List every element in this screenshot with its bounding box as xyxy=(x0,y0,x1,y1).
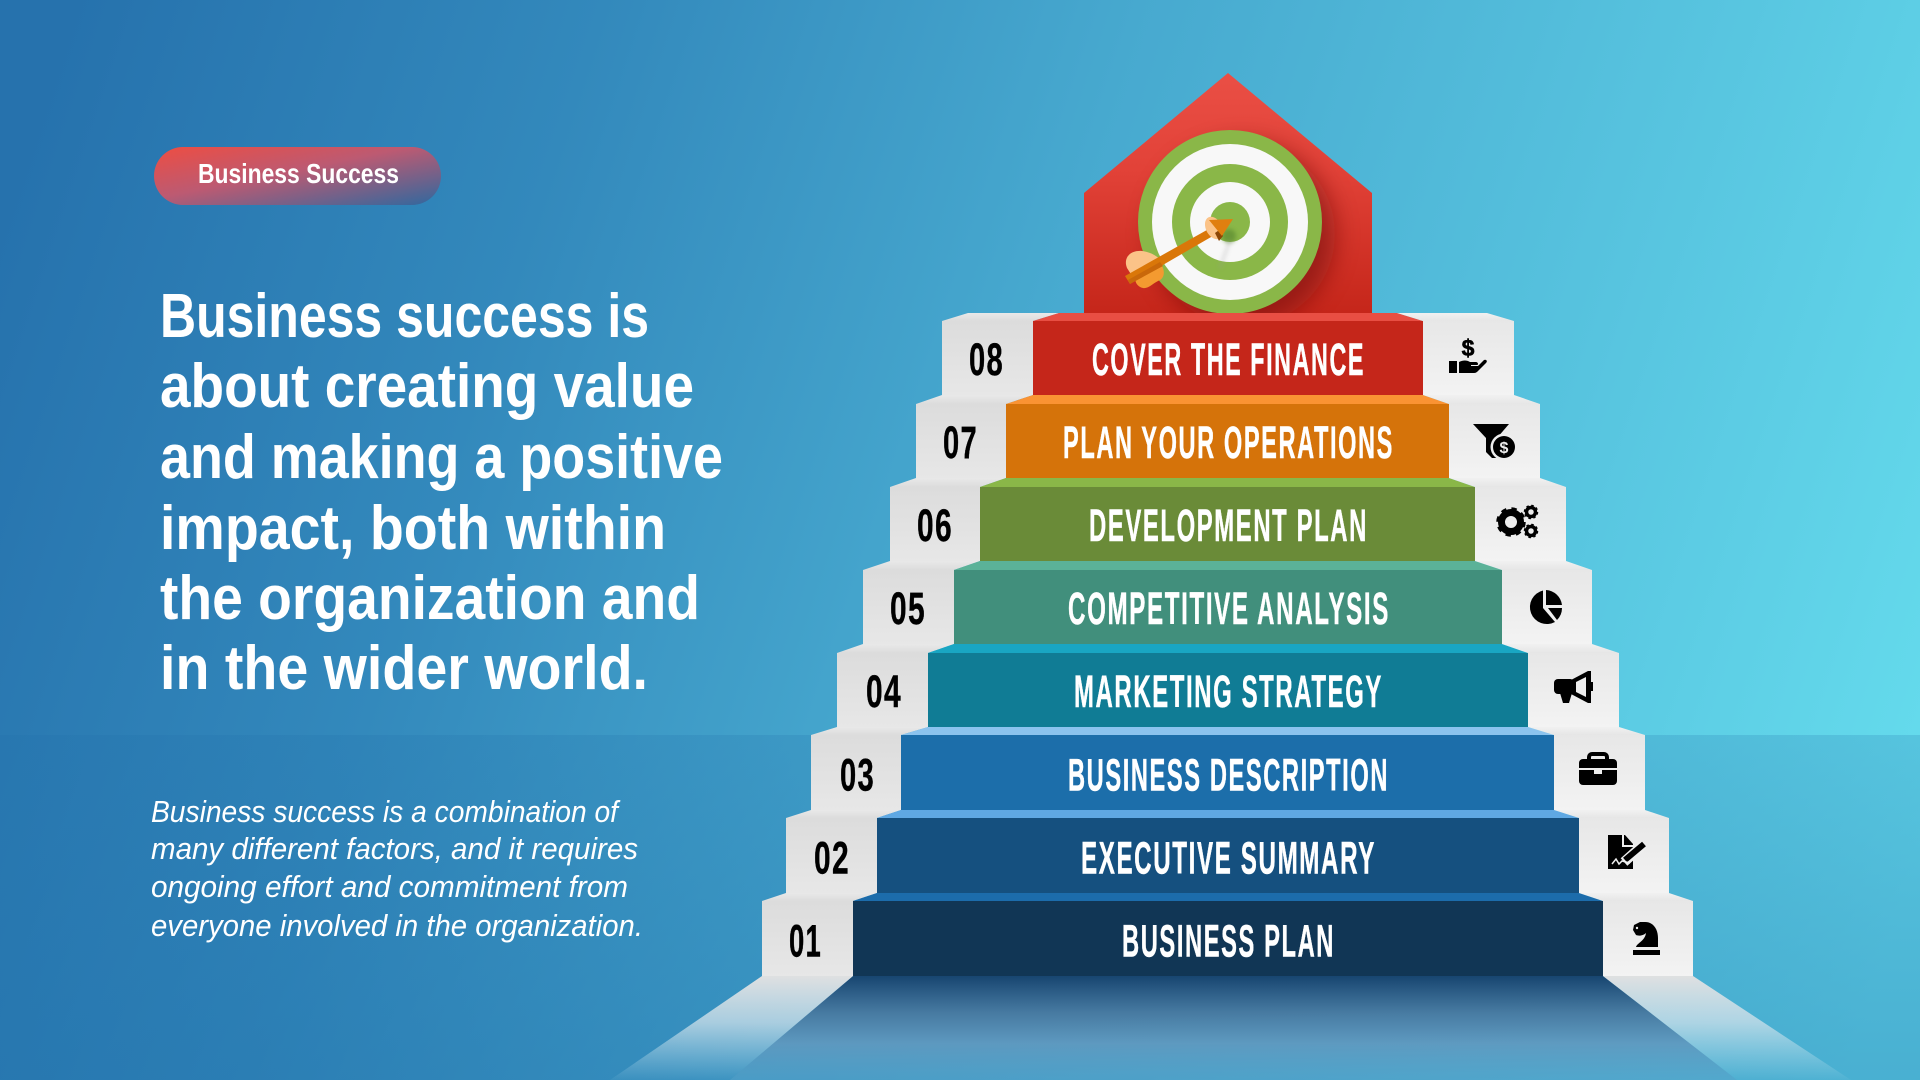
badge: Business Success xyxy=(154,147,441,205)
heading xyxy=(160,282,723,703)
body text: many different factors, and it requires xyxy=(151,831,638,866)
icon: chess knight xyxy=(1633,922,1660,955)
icon: funnel with dollar xyxy=(1473,424,1518,460)
step 01: business plan: BUSINESS PLAN xyxy=(1122,916,1335,966)
step 02: executive summary: 02 xyxy=(814,832,850,884)
step 04: marketing strategy: MARKETING STRATEGY xyxy=(1074,666,1383,717)
step 08: cover the finance xyxy=(942,313,1514,395)
step 04: marketing strategy xyxy=(837,644,1619,727)
icon: hand with dollar: $ xyxy=(1462,335,1475,361)
body text: Business success is a combination of xyxy=(151,794,621,829)
step 06: development plan: 06 xyxy=(917,500,953,551)
icon: signed document xyxy=(1608,835,1644,869)
heading: about creating value xyxy=(160,352,694,421)
step 07: plan your operations: 07 xyxy=(943,417,978,468)
step 03: business description xyxy=(811,727,1645,810)
house and target xyxy=(1084,73,1372,326)
step 02: executive summary: EXECUTIVE SUMMARY xyxy=(1081,832,1376,884)
step 07: plan your operations: PLAN YOUR OPERATIONS xyxy=(1063,417,1394,468)
step 06: development plan: DEVELOPMENT PLAN xyxy=(1089,500,1368,551)
heading: impact, both within xyxy=(160,494,666,563)
heading: Business success is xyxy=(160,282,649,351)
heading: the organization and xyxy=(160,564,700,633)
heading: and making a positive xyxy=(160,423,723,492)
step 05: competitive analysis: COMPETITIVE ANALYSIS xyxy=(1068,583,1390,634)
step 08: cover the finance: 08 xyxy=(969,334,1004,385)
step 01: business plan: 01 xyxy=(789,916,822,966)
step 07: plan your operations xyxy=(916,395,1540,478)
floor path xyxy=(610,976,1851,1080)
step 02: executive summary xyxy=(786,810,1669,893)
body text: everyone involved in the organization. xyxy=(151,908,643,943)
step 03: business description: BUSINESS DESCRIPTION xyxy=(1068,750,1389,800)
icon: megaphone xyxy=(1554,671,1593,703)
body text: ongoing effort and commitment from xyxy=(151,869,628,904)
step 05: competitive analysis xyxy=(863,561,1592,644)
step 04: marketing strategy: 04 xyxy=(866,666,902,717)
badge: Business Success: Business Success xyxy=(198,158,399,189)
step 06: development plan xyxy=(890,478,1566,561)
body text xyxy=(151,794,643,943)
icon: gears xyxy=(1498,506,1537,537)
icon: pie chart xyxy=(1530,590,1562,624)
arrow xyxy=(1125,214,1233,288)
icon: funnel with dollar: $ xyxy=(1500,440,1509,457)
step 08: cover the finance: COVER THE FINANCE xyxy=(1092,334,1365,385)
step 03: business description: 03 xyxy=(840,750,875,800)
icon: briefcase xyxy=(1579,754,1617,785)
step 05: competitive analysis: 05 xyxy=(890,583,926,634)
heading: in the wider world. xyxy=(160,634,648,703)
icon: hand with dollar xyxy=(1449,335,1487,373)
step 01: business plan xyxy=(762,893,1693,976)
